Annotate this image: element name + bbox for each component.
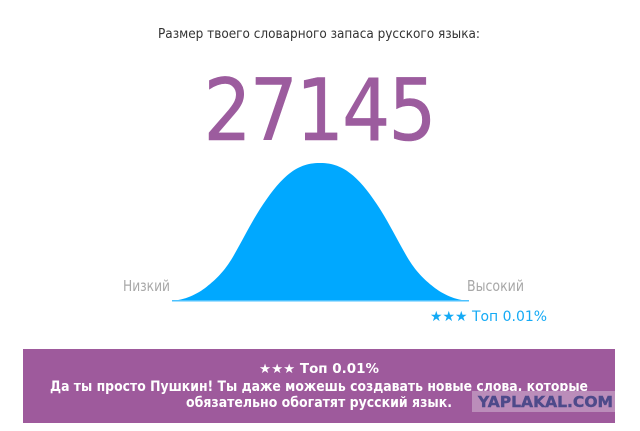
bell curve chart (172, 163, 469, 302)
rank label: ★★★ Топ 0.01% (430, 309, 547, 325)
label: low: Низкий (123, 277, 170, 295)
score number: 27145 (204, 61, 435, 161)
result description line 1: Да ты просто Пушкин! Ты даже можешь создавать новые слова, которые (50, 379, 588, 395)
label: high: Высокий (467, 277, 524, 295)
watermark: YAPLAKAL.COM (477, 393, 613, 411)
result heading: ★★★ Топ 0.01% (259, 362, 379, 377)
result description line 2: обязательно обогатят русский язык. (186, 395, 452, 411)
title: Размер твоего словарного запаса русского языка: (158, 26, 480, 42)
panel: result message (23, 349, 615, 423)
